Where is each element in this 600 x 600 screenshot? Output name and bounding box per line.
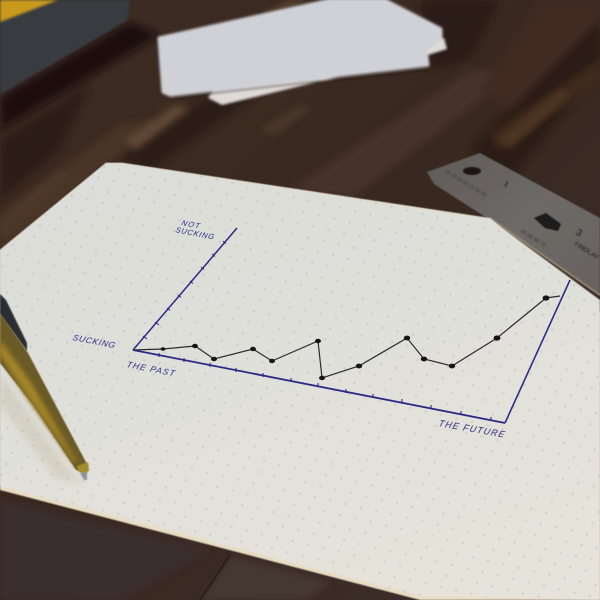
x axis — [133, 350, 505, 423]
axis label: Not Sucking: NOT — [180, 218, 203, 231]
object: steel ruler: 3 — [573, 227, 584, 240]
data line — [133, 296, 560, 378]
panel: dot-grid notebook paper — [0, 163, 600, 600]
object: steel ruler: 30 40 50 60 70 80 90 — [444, 169, 487, 199]
line chart — [133, 228, 570, 423]
object: stack of white cards — [159, 0, 447, 105]
y axis — [133, 228, 237, 350]
right boundary line — [505, 280, 570, 423]
object: steel ruler — [427, 153, 600, 296]
object: yellow and grey box, top left — [0, 0, 160, 130]
axis label: The Future: THE FUTURE — [437, 418, 507, 440]
object: gold pen — [0, 294, 89, 484]
axis label: Not Sucking: SUCKING — [174, 225, 216, 241]
object: steel ruler: FINDLAY — [573, 241, 600, 262]
axis label: Not Sucking — [174, 218, 216, 241]
data points — [160, 295, 549, 380]
axis label: The Past: THE PAST — [125, 359, 177, 378]
axis label: Sucking: SUCKING — [71, 332, 117, 350]
object: steel ruler: 40 50 60 70 — [519, 229, 547, 249]
object: steel ruler: 1 — [502, 179, 511, 189]
